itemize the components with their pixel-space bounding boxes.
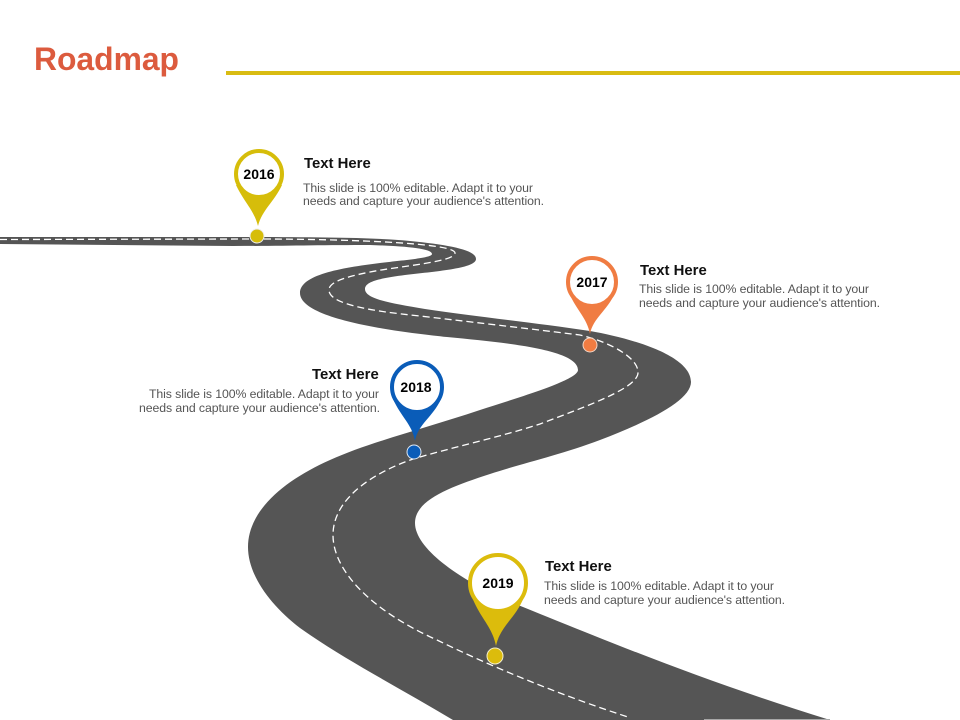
text block 2019: needs and capture your audience's attention. <box>544 593 785 607</box>
text block 2016: needs and capture your audience's attention. <box>303 194 544 208</box>
pin 2019 <box>470 555 526 664</box>
text block 2016: Text Here <box>304 156 371 172</box>
pin 2017 <box>568 258 616 352</box>
text block 2016: This slide is 100% editable. Adapt it to your <box>303 181 533 195</box>
pin 2016 <box>236 151 282 243</box>
pin 2018 <box>392 362 442 459</box>
text block 2019: This slide is 100% editable. Adapt it to your <box>544 579 774 593</box>
text block 2017: Text Here <box>640 263 707 279</box>
text block 2018: needs and capture your audience's attention. <box>139 401 380 415</box>
pin 2016: 2016 <box>243 166 275 182</box>
title: Roadmap <box>34 41 179 77</box>
pin 2019: 2019 <box>482 575 514 591</box>
pin 2017: 2017 <box>576 274 608 290</box>
text block 2017: needs and capture your audience's attention. <box>639 296 880 310</box>
text block 2016 <box>303 156 544 208</box>
text block 2019 <box>544 559 785 607</box>
text block 2018 <box>139 367 380 415</box>
text block 2019: Text Here <box>545 559 612 575</box>
pin 2018: 2018 <box>400 379 432 395</box>
text block 2018: This slide is 100% editable. Adapt it to your <box>149 387 379 401</box>
text block 2018: Text Here <box>312 367 379 383</box>
text block 2017: This slide is 100% editable. Adapt it to your <box>639 282 869 296</box>
winding road <box>0 237 830 720</box>
text block 2017 <box>639 263 880 310</box>
